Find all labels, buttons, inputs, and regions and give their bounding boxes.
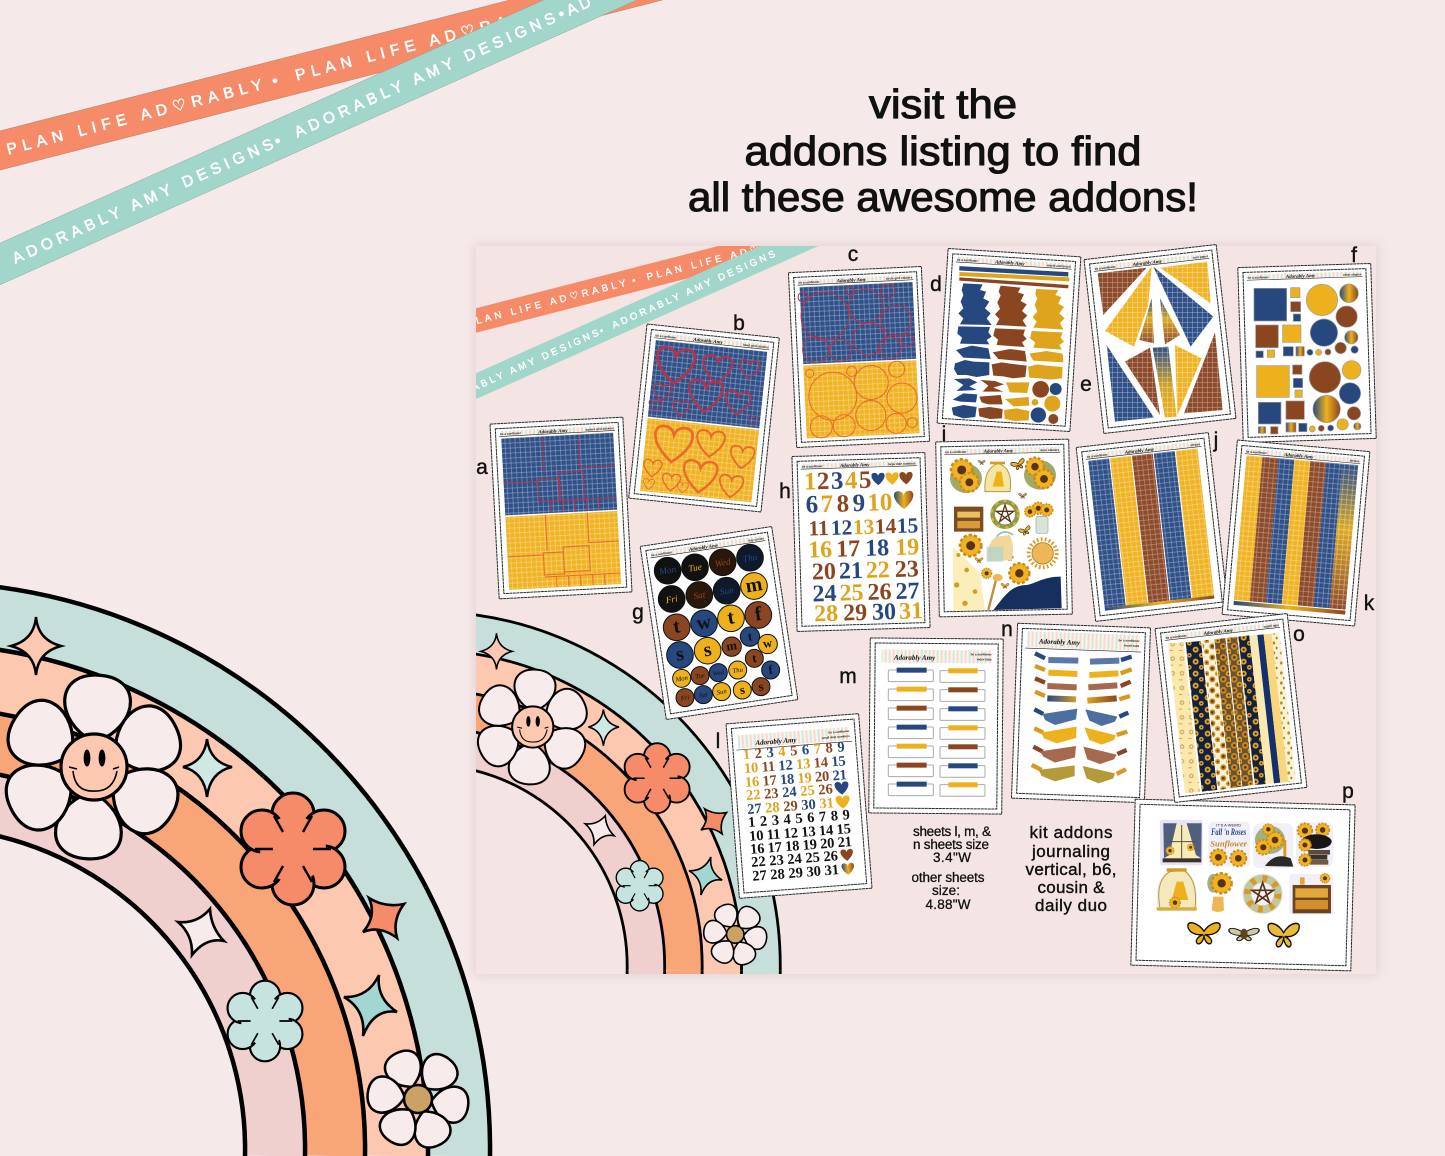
sheet letter labels: k [1364, 592, 1375, 615]
sheet e: torn grid pieces: Adorably Amy [1132, 260, 1163, 268]
sheet g: day circles: t [726, 606, 736, 629]
mini teal ribbon: ADORABLY AMY DESIGNS [611, 249, 777, 331]
teal ribbon: ADORABLY AMY DESIGNS [292, 10, 558, 141]
coral ribbon [0, 0, 721, 174]
sheet g: day circles: s [757, 679, 765, 694]
sheet h: large date numbers: 21 [838, 558, 863, 585]
sheet h: large date numbers: 28 [814, 601, 839, 627]
sheet g: day circles: t [672, 615, 682, 638]
sheet letter labels: g [632, 601, 644, 624]
sheet h: large date numbers: 16 [808, 537, 833, 564]
sticker: window [1160, 820, 1203, 865]
sheet letter labels: b [733, 312, 745, 335]
mini coral ribbon [476, 246, 760, 333]
sheet g: day circles: Fri [664, 594, 679, 606]
sheet l: small date numbers: be a sunflower [828, 729, 850, 735]
sheet l: small date numbers: small date numbers [822, 734, 850, 740]
sheet h: large date numbers: 31 [899, 598, 923, 625]
sheet n: brush tabs: Adorably Amy [1038, 637, 1081, 647]
sheet j: stripes five: be a sunflower [1087, 452, 1109, 459]
sheet h: large date numbers: 30 [872, 599, 896, 626]
panel shadow [474, 244, 1378, 976]
sheet g: day circles: Thu [732, 666, 744, 675]
sheet h: large date numbers: 1 [804, 468, 817, 496]
sheet h: large date numbers: 12 [830, 515, 853, 540]
sheet letter labels: c [848, 243, 858, 266]
sticker: wreath [1242, 873, 1283, 915]
kit addons note: kit addons [1030, 823, 1112, 842]
sheet g: day circles: t [747, 629, 754, 644]
sheet h: large date numbers: 3 [831, 468, 844, 495]
sheet l: small date numbers: 16 17 18 19 20 21 [750, 834, 853, 858]
sheet c: circle grid papers [788, 266, 930, 448]
sheet letter labels: e [1080, 373, 1092, 396]
sheet g: day circles: Mon [674, 675, 689, 684]
sheet l: small date numbers: Adorably Amy [754, 736, 798, 747]
sheet i: sunflower stickers: Adorably Amy [983, 449, 1014, 455]
sheet d: brush strokes: washi and brush [1046, 263, 1071, 269]
sheet letter labels: p [1342, 780, 1354, 803]
sheet g: day circles: Tue [688, 563, 703, 575]
sheet g: day circles: Sat [693, 590, 707, 602]
sheet e: torn grid pieces [1084, 245, 1236, 433]
sheet h: large date numbers: 10 [867, 489, 893, 517]
sheet k: stripes seven: stripes [1350, 458, 1360, 463]
sheet letter labels: h [779, 480, 791, 503]
sheet g: day circles: f [753, 603, 764, 626]
sheet o: washi strips: Adorably Amy [1203, 629, 1234, 637]
sticker: bouquet [1253, 823, 1293, 868]
sizes note: 4.88"W [926, 897, 971, 912]
sheet h: large date numbers: 5 [859, 467, 872, 494]
sheet b: heart grid papers: heart grid stickers [743, 343, 769, 349]
sheet g: day circles: Wed [714, 557, 732, 570]
sheet l: small date numbers: 1 2 3 4 5 6 7 8 9 [742, 739, 845, 763]
sheet i: sunflower stickers [936, 439, 1072, 617]
sheet d: brush strokes: be a sunflower [957, 258, 979, 263]
sizes note: sheets l, m, & [913, 824, 991, 839]
sheet l: small date numbers: 10 11 12 13 14 15 [743, 753, 846, 777]
sheet i: sunflower stickers: be a sunflower [945, 450, 967, 454]
mini teal ribbon: ADORABLY AMY DESIGNS [434, 328, 601, 410]
sheet h: large date numbers: 25 [839, 580, 864, 607]
sheet g: day circles: s [739, 683, 746, 697]
sheet o: washi strips: washi tape [1262, 623, 1279, 629]
sizes note: size: [932, 883, 960, 898]
sticker: quote: IT'S A WEIRD [1216, 823, 1241, 828]
mini rainbow [471, 614, 780, 974]
panel: addons preview [476, 244, 1377, 974]
coral ribbon: • [270, 72, 280, 90]
sheet h: large date numbers: 26 [867, 579, 892, 606]
sheet l: small date numbers: 16 17 18 19 20 21 [744, 767, 847, 791]
sheet h: large date numbers: 15 [896, 513, 919, 538]
sheet letter labels: o [1293, 623, 1305, 646]
sheet e: torn grid pieces: be a sunflower [1094, 264, 1117, 271]
sheet b: heart grid papers: Adorably Amy [692, 338, 724, 346]
sheet a: square grid papers: Adorably Amy [537, 429, 569, 436]
coral ribbon: PLAN LIFE AD♡RABLY [294, 2, 553, 84]
sheet j: stripes five: stripes [1190, 442, 1201, 447]
mini teal ribbon [476, 246, 818, 399]
sheet h: large date numbers: 29 [843, 600, 867, 627]
sheet g: day circles: Sat [699, 691, 708, 700]
sticker: quote: Fall 'n Roses [1210, 828, 1246, 838]
sheet l: small date numbers [726, 714, 872, 898]
sheet g: day circles: Mon [658, 565, 677, 578]
sheet f: squares and circles: other shapes [1343, 272, 1362, 277]
sheet l: small date numbers: 1 2 3 4 5 6 7 8 9 [748, 807, 850, 831]
teal ribbon: ADORABLY AMY DESIGNS [10, 136, 276, 267]
sheet g: day circles: Sun [716, 688, 728, 697]
sheet h: large date numbers: 19 [895, 534, 920, 561]
heading: addons listing to find [744, 128, 1142, 174]
sheet h: large date numbers: 8 [836, 490, 850, 518]
sheet a: square grid papers: square grid stickers [585, 426, 614, 432]
sheet a: square grid papers: be a sunflower [500, 431, 522, 436]
sheet l: small date numbers: 22 23 24 25 26 [751, 848, 839, 871]
sheet i: sunflower stickers: deco stickers [1040, 448, 1060, 452]
sheet g: day circles: m [744, 573, 764, 598]
sticker: sunflower vase [1207, 873, 1232, 912]
sheet l: small date numbers: 10 11 12 13 14 15 [749, 821, 852, 845]
sizes note: 3.4"W [933, 850, 971, 865]
sheet e: torn grid pieces: torn paper [1193, 254, 1209, 260]
sheet h: large date numbers: 13 [852, 515, 875, 539]
sheet g: day circles: f [767, 663, 775, 677]
sheet n: brush tabs [1011, 623, 1151, 803]
sheet f: squares and circles: be a sunflower [1248, 275, 1269, 280]
sheet g: day circles: w [695, 611, 713, 635]
sheet c: circle grid papers: be a sunflower [798, 280, 820, 285]
mini coral ribbon: PLAN LIFE AD♡RABLY [646, 232, 808, 283]
sheet g: day circles: day circles [748, 536, 764, 543]
sheet d: brush strokes [937, 248, 1081, 432]
kit addons note: cousin & [1038, 878, 1105, 897]
sheet g: day circles: m [725, 638, 738, 654]
sheet h: large date numbers: 11 [808, 516, 829, 541]
sheet g: day circles [640, 527, 798, 719]
sheet h: large date numbers: 20 [811, 559, 836, 585]
sheet letter labels: i [942, 423, 946, 446]
sheet letter labels: a [476, 456, 488, 479]
sheet g: day circles: Fri [679, 694, 690, 703]
sticker: black cat on books [1296, 823, 1333, 867]
sheet d: brush strokes: Adorably Amy [994, 260, 1025, 267]
sheet letter labels [476, 243, 1375, 803]
sheet h: large date numbers: 7 [820, 491, 834, 518]
kit addons note: journaling [1031, 842, 1110, 861]
sticker: shelf [1289, 874, 1333, 915]
sheet h: large date numbers: Adorably Amy [839, 463, 870, 469]
sheet g: day circles: be a sunflower [651, 550, 673, 557]
heading [688, 81, 1198, 220]
sheet h: large date numbers: 24 [812, 581, 837, 607]
sheet m: index tabs [869, 638, 1003, 814]
sticker: quote [1208, 822, 1250, 867]
sizes note [912, 824, 991, 912]
sheet o: washi strips [1155, 614, 1307, 802]
kit addons note [1026, 823, 1116, 915]
sheet letter labels: l [716, 730, 720, 753]
sheet letter labels: j [1213, 429, 1218, 452]
sheet g: day circles: Sun [719, 586, 735, 598]
coral ribbon: PLAN LIFE AD♡RABLY [5, 77, 264, 158]
sheet h: large date numbers: 14 [874, 514, 897, 539]
sheet g: day circles: Thu [742, 553, 758, 565]
sheet k: stripes seven [1222, 440, 1370, 626]
sheet g: day circles: t [751, 651, 758, 666]
sheet m: index tabs: Adorably Amy [893, 654, 936, 662]
sheet h: large date numbers [792, 453, 930, 631]
sheet letter labels: n [1001, 618, 1013, 641]
sheet l: small date numbers: 27 28 29 30 31 [752, 862, 840, 885]
sheet f: squares and circles [1238, 263, 1376, 443]
sheet h: large date numbers: large date numbers [888, 461, 916, 466]
sheet letter labels: d [930, 273, 942, 296]
sheet g: day circles: Adorably Amy [688, 544, 719, 553]
sheet n: brush tabs: be a sunflower [1118, 638, 1140, 643]
sheet o: washi strips: be a sunflower [1165, 633, 1188, 640]
sheet h: large date numbers: 18 [865, 535, 890, 562]
sheet h: large date numbers: 27 [895, 578, 920, 605]
sheet p: landscape stickers [1131, 799, 1355, 971]
sheet c: circle grid papers: circle grid stickers [886, 275, 913, 281]
sheet l: small date numbers: 27 28 29 30 31 [747, 795, 835, 818]
sizes note: other sheets [912, 870, 985, 885]
sticker: quote: Sunflower [1210, 840, 1248, 849]
sticker: butterfly and bee row [1188, 923, 1299, 947]
sheet l: small date numbers: 22 23 24 25 26 [745, 781, 833, 804]
sheet letter labels: f [1351, 244, 1357, 267]
sheet g: day circles: Tue [695, 672, 705, 681]
sheet g: day circles: Wed [712, 669, 725, 678]
sheet letter labels: m [839, 665, 857, 688]
heading: all these awesome addons! [688, 174, 1198, 220]
heading: visit the [869, 81, 1017, 127]
sheet g: day circles: w [762, 636, 774, 651]
sheet j: stripes five: Adorably Amy [1124, 448, 1155, 456]
sheet m: index tabs: index tabs [977, 657, 992, 661]
sheet b: heart grid papers: be a sunflower [655, 333, 677, 340]
sheet h: large date numbers: 4 [845, 467, 858, 494]
sizes note: n sheets size [913, 837, 989, 852]
sheet a: square grid papers [490, 417, 632, 599]
teal ribbon [0, 0, 683, 290]
kit addons note: vertical, b6, [1026, 860, 1116, 879]
kit addons note: daily duo [1035, 896, 1107, 915]
sheet h: large date numbers: 23 [894, 556, 919, 583]
sheet m: index tabs: be a sunflower [971, 652, 992, 656]
sheet h: large date numbers: 17 [836, 536, 861, 563]
teal ribbon: • [272, 132, 284, 150]
mini coral ribbon: PLAN LIFE AD♡RABLY [465, 278, 628, 330]
sheet h: large date numbers: 22 [865, 557, 890, 584]
sheet g: day circles: s [674, 643, 686, 666]
mini teal ribbon: • [598, 326, 606, 337]
sheet h: large date numbers: 2 [817, 468, 830, 495]
sheet k: stripes seven: Adorably Amy [1283, 453, 1314, 461]
mini coral ribbon: • [631, 275, 637, 287]
sheet h: large date numbers: 9 [852, 490, 866, 517]
sheet j: stripes five [1076, 433, 1228, 621]
sheet k: stripes seven: be a sunflower [1246, 449, 1268, 455]
sheet b: heart grid papers [629, 324, 779, 512]
sheet h: large date numbers: be a sunflower [802, 464, 824, 469]
sheet g: day circles: s [702, 638, 713, 661]
sheet c: circle grid papers: Adorably Amy [836, 278, 867, 284]
large rainbow with flowers and stars [0, 587, 490, 1156]
sheet h: large date numbers: 6 [805, 491, 819, 519]
sheet n: brush tabs: brush tabs [1124, 643, 1140, 648]
sheet f: squares and circles: Adorably Amy [1285, 274, 1316, 280]
sticker: terrarium jar [1157, 868, 1197, 911]
